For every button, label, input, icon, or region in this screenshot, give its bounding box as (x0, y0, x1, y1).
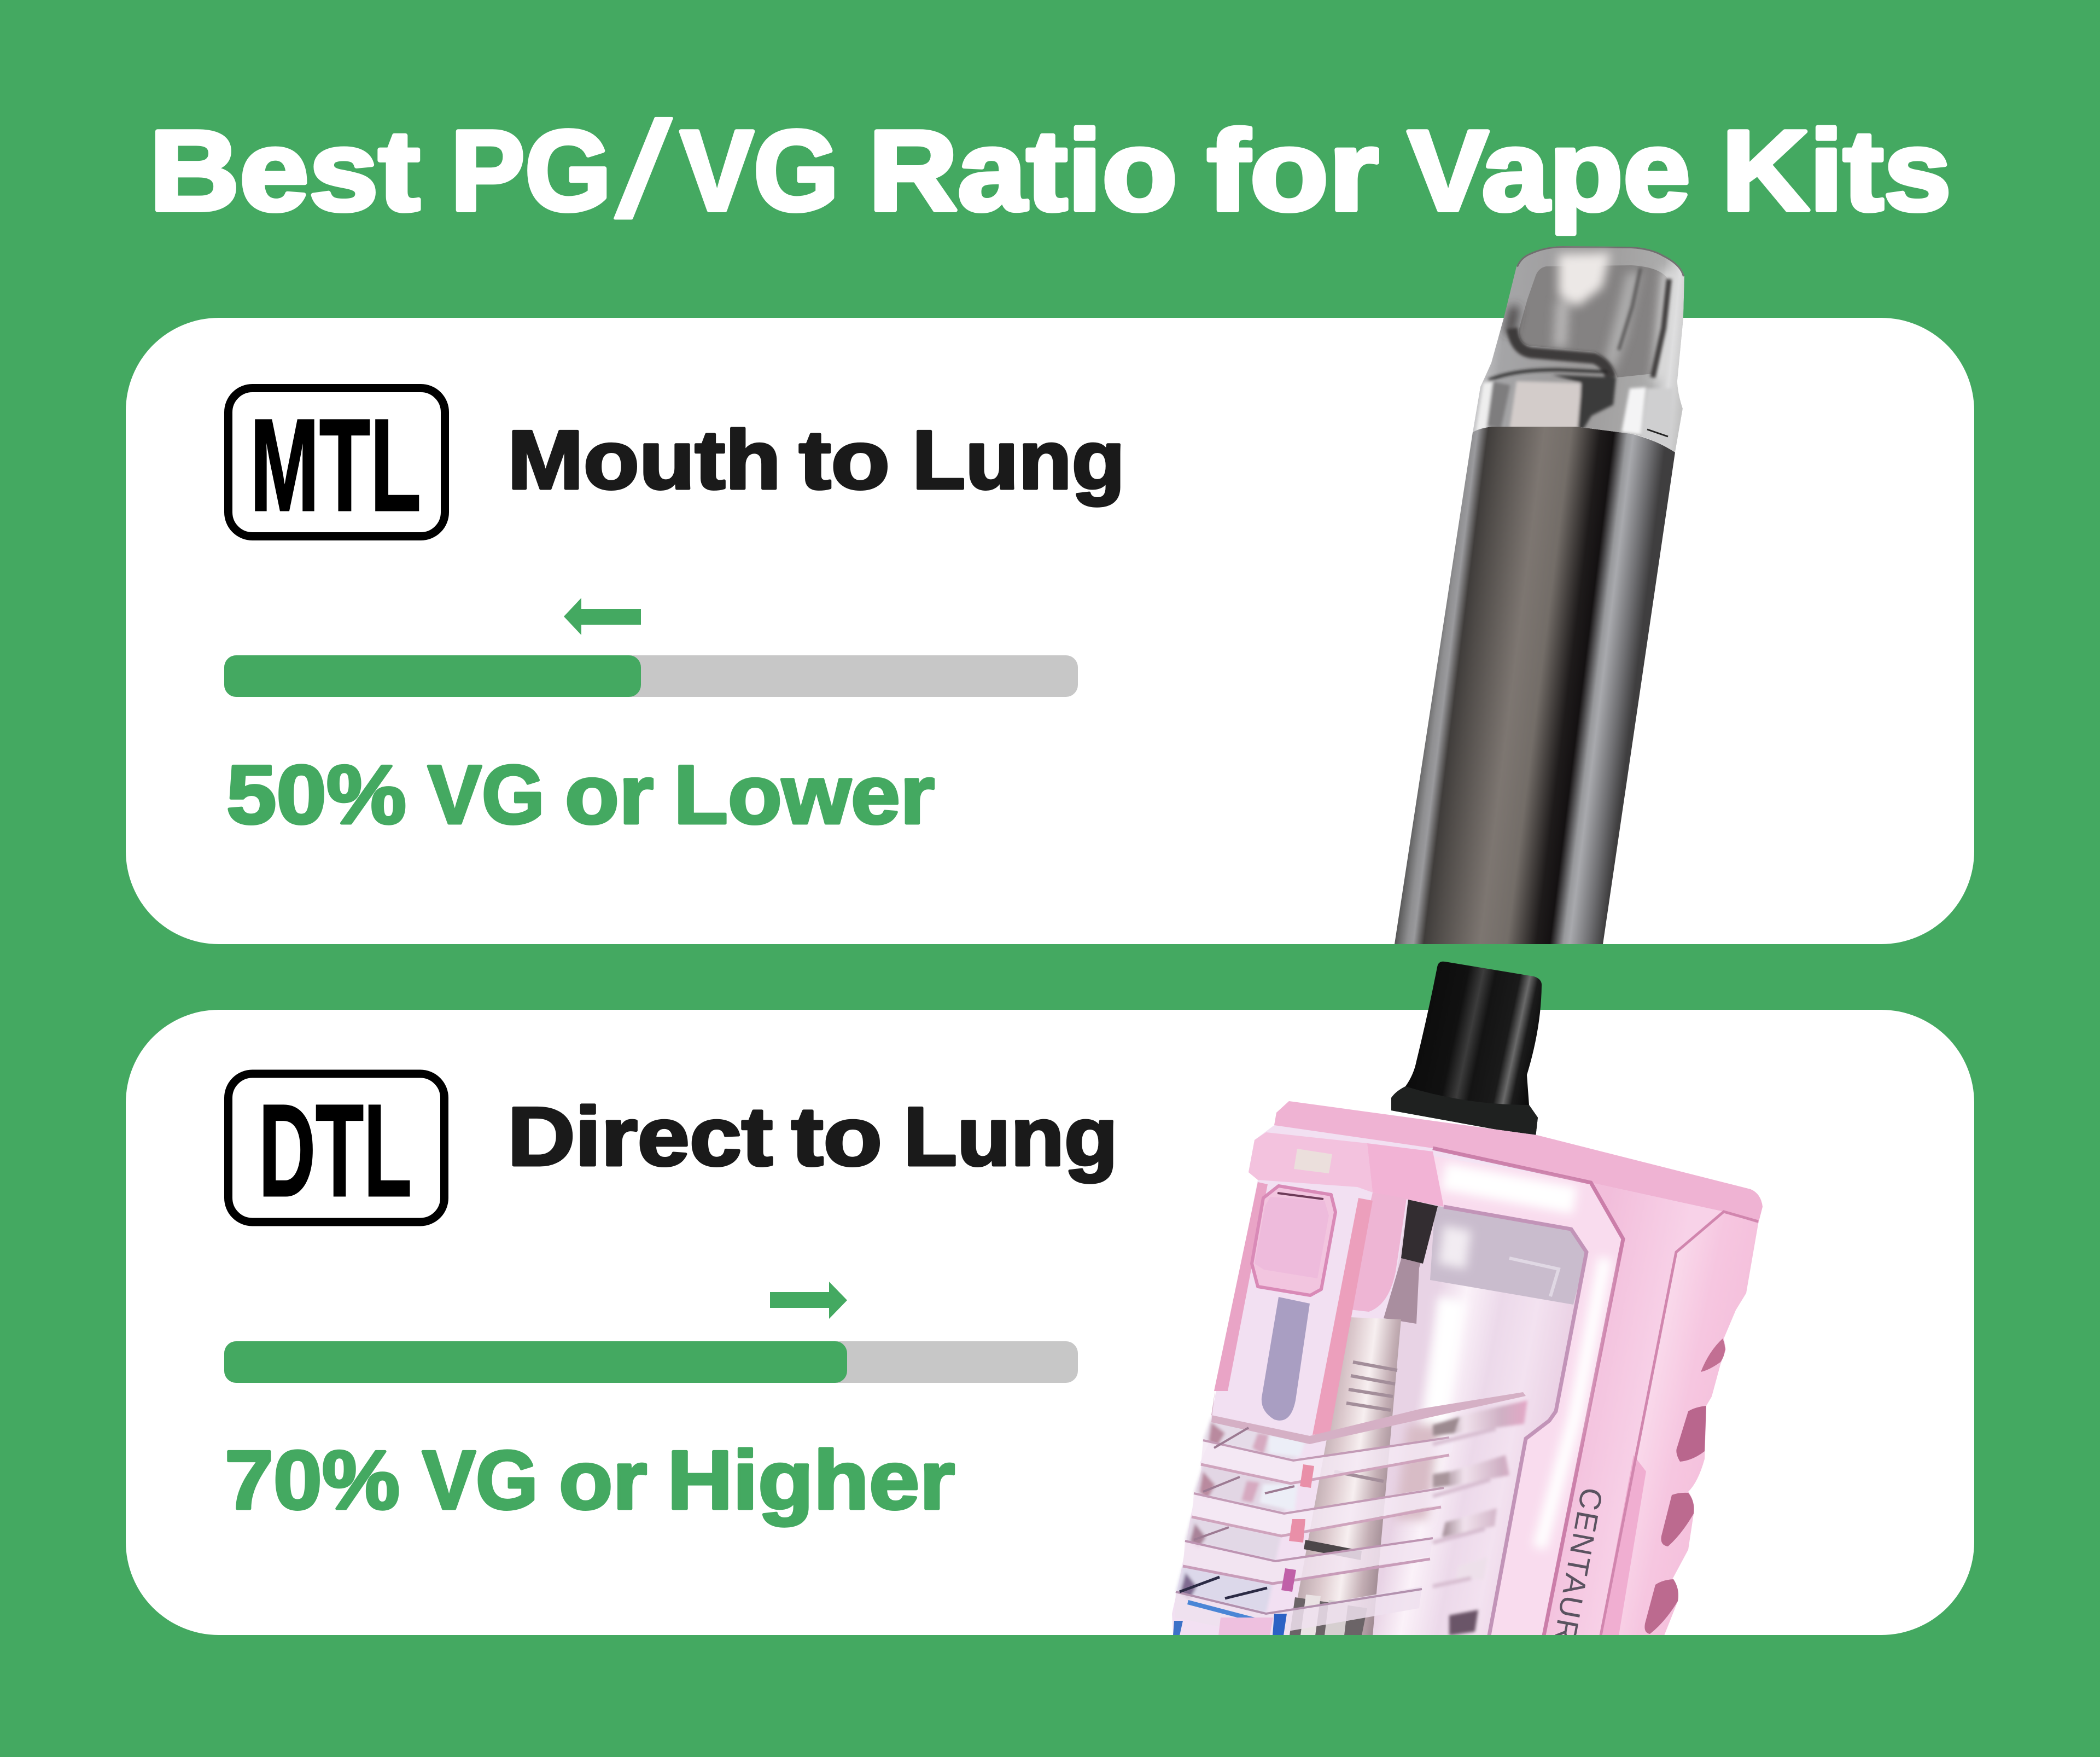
pink curved arm (1350, 1192, 1407, 1312)
title: for (1207, 107, 1379, 235)
rib pockets (1176, 1417, 1310, 1614)
charging port (1294, 1149, 1332, 1173)
metal frame (1373, 1146, 1623, 1636)
label: 70% VG or Higher: Higher (667, 1434, 955, 1527)
label: 50% VG or Lower: 50% (226, 748, 406, 841)
top clear block (1249, 1132, 1373, 1192)
label: 50% VG or Lower: or (565, 748, 654, 841)
pod mouthpiece (1473, 246, 1684, 452)
title: PG (451, 107, 611, 235)
badge: MTL: MTL (250, 392, 421, 538)
badge: DTL: DTL (259, 1077, 412, 1224)
heading: Mouth to Lung (508, 414, 1125, 507)
device: grey pod vape (1395, 246, 1684, 944)
label: 70% VG or Higher: 70% (225, 1434, 400, 1527)
tip collar (1391, 1086, 1538, 1137)
label: 70% VG or Higher (225, 1434, 955, 1527)
panel background (126, 1010, 1974, 1635)
title: Vape (1408, 107, 1690, 235)
ratio bar: 70 percent (224, 1341, 1078, 1383)
title: / (615, 94, 672, 246)
brand text on device: CENTAURUS (1539, 1485, 1609, 1691)
side panel (1601, 1212, 1758, 1636)
ratio bar: 50 percent (224, 655, 1078, 697)
title (149, 94, 1951, 246)
title: VG (680, 107, 839, 235)
label: 50% VG or Lower: Lower (674, 748, 935, 841)
heading: Direct to Lung: Lung (903, 1090, 1118, 1183)
heading: Mouth to Lung: Lung (912, 414, 1125, 507)
left edge strip (1214, 1182, 1268, 1391)
title: Kits (1722, 107, 1951, 235)
right slats (1433, 1400, 1527, 1636)
dark gap above core (1384, 1200, 1438, 1324)
panel background (126, 318, 1974, 944)
heading: Mouth to Lung: Mouth (508, 414, 781, 507)
grip dents (1644, 1339, 1725, 1634)
bottom blue gradient (1173, 1600, 1287, 1636)
grey-blue capsule (1262, 1297, 1310, 1421)
title: Best (149, 107, 420, 235)
box body (1172, 1125, 1551, 1635)
arrow: right (770, 1282, 847, 1319)
heading: Mouth to Lung: to (799, 414, 890, 507)
pod body (1395, 427, 1675, 944)
clear tank (1340, 1200, 1586, 1636)
heading: Direct to Lung (508, 1090, 1118, 1183)
power button (1252, 1186, 1335, 1295)
tray under cap (1367, 1143, 1444, 1207)
badge: MTL (229, 388, 445, 538)
rib hatch lines (1194, 1428, 1294, 1540)
top cap lip (1274, 1101, 1763, 1224)
label: 50% VG or Lower (226, 748, 935, 841)
arrow: left (564, 598, 641, 635)
panel: mouth to lung (126, 318, 1974, 944)
divider strip (1312, 1198, 1373, 1435)
label: 50% VG or Lower: VG (428, 748, 545, 841)
panel: direct to lung (126, 1010, 1974, 1635)
title: Ratio (868, 107, 1177, 235)
label: 70% VG or Higher: VG (422, 1434, 538, 1527)
label: 70% VG or Higher: or (559, 1434, 647, 1527)
frame outer panel (1544, 1183, 1724, 1636)
black drip tip (1391, 962, 1542, 1137)
device: pink box vape (1172, 962, 1763, 1691)
infographic canvas (126, 117, 1974, 1635)
chevron ribs (1175, 1389, 1526, 1636)
grip chamfer (1600, 1455, 1646, 1636)
frame edge lines (1433, 1148, 1623, 1636)
badge: DTL (229, 1074, 444, 1224)
heading: Direct to Lung: to (791, 1090, 882, 1183)
metal core (1290, 1317, 1401, 1636)
window highlights (1444, 1176, 1605, 1548)
divider segments through ribs (1300, 1464, 1314, 1488)
heading: Direct to Lung: Direct (508, 1090, 773, 1183)
